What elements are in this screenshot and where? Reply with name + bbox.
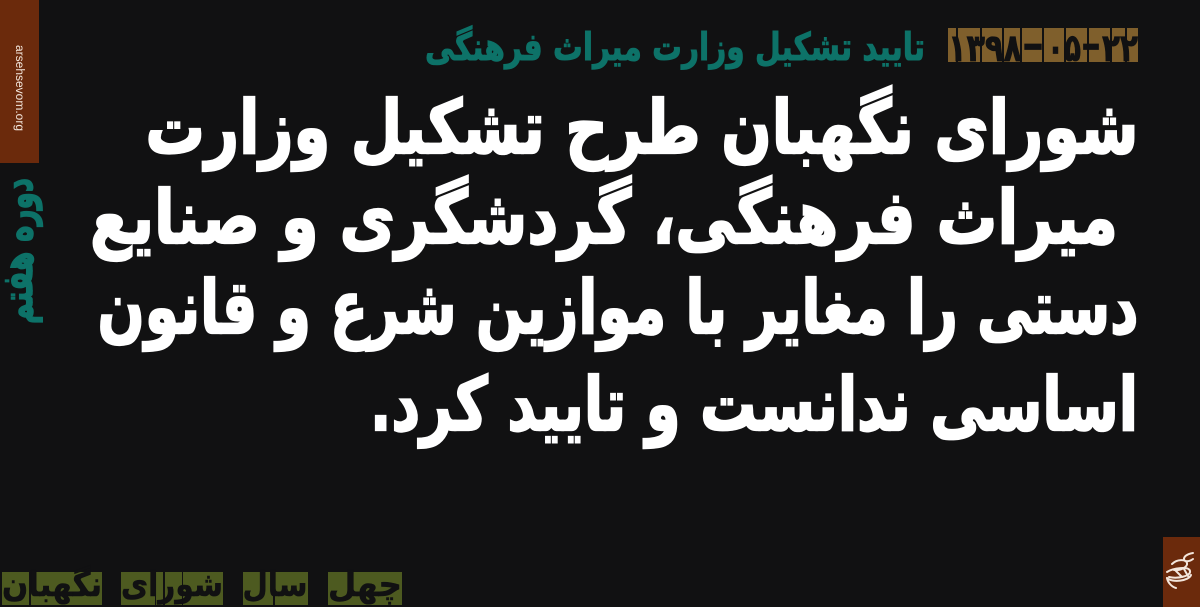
panel: website side tab [0,0,39,163]
main statement [90,85,1138,449]
series title tiles [2,565,402,605]
word: sal: سال [242,565,308,605]
subtitle: تایید تشکیل وزارت میراث فرهنگی [425,25,925,70]
logo tab [1163,537,1200,607]
date badge [948,23,1138,70]
website address: arsehsevom.org [13,45,25,131]
date dash: - [1081,23,1101,67]
date month: ۰۵ [1047,26,1081,70]
date year: ۱۳۹۸ [948,26,1022,70]
icon: calligraphic logo [1167,553,1193,588]
word: negahban: نگهبان [2,565,102,605]
word: shoraye: شورای [121,565,223,605]
date dash: - [1022,23,1044,67]
date day: ۲۲ [1102,26,1138,70]
word: chehel: چهل [328,565,402,605]
